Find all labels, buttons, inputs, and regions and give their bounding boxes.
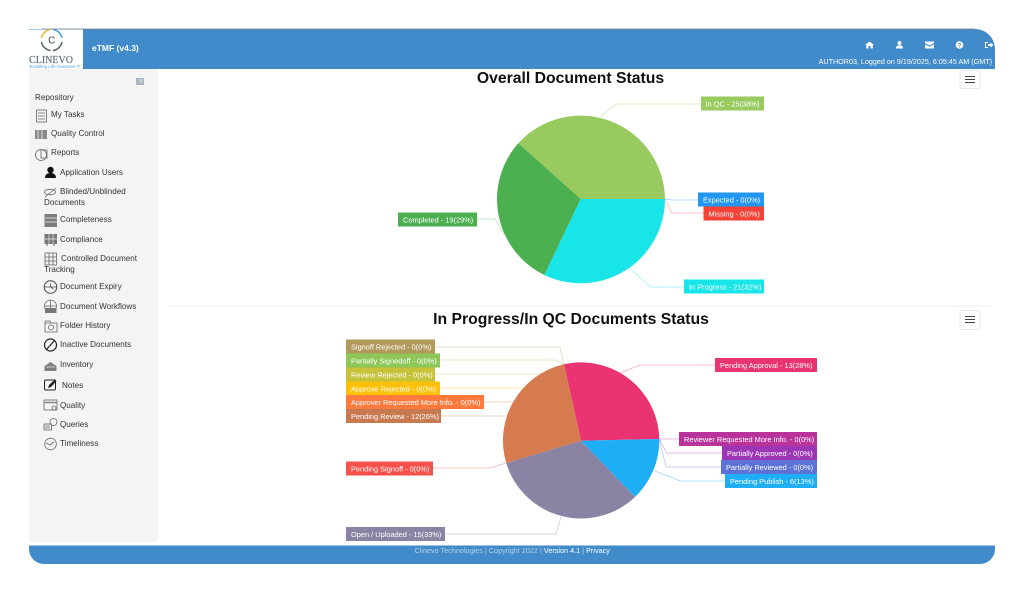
nav item: reports (36, 148, 79, 160)
label: review rejected: Review Rejected - 0(0%) (351, 370, 433, 379)
button: chart menu (960, 310, 980, 330)
nav item: my tasks: My Tasks (51, 110, 85, 119)
nav item: blinded documents: Documents (44, 198, 85, 207)
app title: eTMF (v4.3) (92, 43, 139, 53)
nav item: inactive documents: Inactive Documents (60, 340, 131, 349)
label: reviewer requested more info: Reviewer Requested More Info. - 0(0%) (684, 435, 814, 444)
label: missing: Missing - 0(0%) (708, 209, 760, 218)
nav item: inactive documents (44, 339, 131, 351)
nav item: queries (44, 418, 88, 430)
label: pending publish: Pending Publish - 6(13%) (730, 477, 814, 486)
label: pending signoff: Pending Signoff - 0(0%) (351, 464, 429, 473)
label: pending signoff (346, 462, 433, 476)
nav item: document workflows: Document Workflows (60, 302, 136, 311)
nav item: timeliness (45, 438, 98, 450)
pie chart (497, 116, 665, 283)
nav item: compliance (44, 234, 103, 246)
label: partially reviewed: Partially Reviewed - 0(0%) (726, 463, 813, 472)
nav item: inventory: Inventory (60, 360, 94, 369)
label: in qc: In QC - 25(38%) (706, 99, 759, 108)
nav item: folder history (45, 321, 111, 332)
logo: Clinevo: Enabling Life Sciences IT (30, 64, 81, 69)
nav item: controlled document tracking: Controlled Document (61, 254, 138, 263)
navigation: repository: Repository (35, 93, 75, 102)
label: completed: Completed - 19(29%) (403, 215, 473, 224)
label: approver requested more info: Approver Requested More Info. - 0(0%) (351, 398, 480, 407)
logo: Clinevo: C (48, 36, 55, 46)
nav item: document workflows (44, 300, 136, 313)
nav item: completeness (44, 214, 112, 227)
footer text: Clinevo Technologies | Copyright 2022 | Version 4.1 | Privacy (414, 546, 610, 555)
label: in qc (701, 96, 764, 110)
label: pending review (346, 409, 441, 423)
label: in progress: In Progress - 21(32%) (689, 282, 761, 291)
label: partially signedoff: Partially Signedoff - 0(0%) (351, 356, 437, 365)
icon: user (896, 41, 903, 48)
label: completed (398, 212, 477, 226)
label: approve rejected: Approve Rejected - 0(0%) (351, 384, 436, 393)
label: expected: Expected - 0(0%) (703, 195, 760, 204)
label: pending review: Pending Review - 12(26%) (351, 412, 439, 421)
nav item: blinded documents (44, 187, 126, 207)
nav item: reports: Reports (51, 148, 79, 157)
nav item: quality: Quality (60, 401, 86, 410)
chart: in progress / in qc documents status (346, 310, 980, 541)
footer bar (29, 546, 995, 564)
logo: Clinevo: CLINEVO (29, 55, 73, 66)
icon: mail (925, 42, 934, 48)
icon: help: ? (958, 43, 962, 49)
nav item: notes (44, 380, 83, 390)
nav item: blinded documents: Blinded/Unblinded (60, 187, 126, 196)
label: pending approval: Pending Approval - 13(28%) (720, 361, 812, 370)
label: pending approval (715, 358, 817, 372)
label: open uploaded (346, 527, 445, 541)
label: reviewer requested more info (679, 432, 817, 446)
icon: help (956, 41, 963, 49)
header bar (29, 29, 995, 69)
nav item: inventory (44, 360, 94, 371)
nav item: completeness: Completeness (60, 215, 112, 224)
nav item: document expiry: Document Expiry (60, 282, 123, 291)
label: missing (704, 206, 764, 220)
leader lines (477, 104, 703, 287)
heading: in progress / in qc documents status: In Progress/In QC Documents Status (433, 311, 709, 328)
heading: overall document status: Overall Document Status (477, 70, 664, 87)
label: partially approved: Partially Approved - 0(0%) (727, 449, 813, 458)
nav item: quality control: Quality Control (51, 129, 105, 138)
panel: sidebar (29, 69, 158, 542)
nav item: quality control (35, 129, 105, 139)
nav item: folder history: Folder History (60, 321, 111, 330)
nav item: compliance: Compliance (60, 235, 103, 244)
label: expected (698, 192, 764, 206)
button: chart menu (960, 70, 980, 88)
icon: home (865, 42, 874, 48)
nav item: queries: Queries (60, 420, 88, 429)
label: signoff rejected: Signoff Rejected - 0(0%) (351, 342, 431, 351)
pie chart (503, 362, 659, 518)
chart: overall document status (398, 70, 980, 294)
nav item: timeliness: Timeliness (60, 439, 98, 448)
label: review rejected (346, 368, 435, 382)
nav item: notes: Notes (62, 381, 83, 390)
label: partially signedoff (346, 354, 440, 368)
label: approve rejected (346, 382, 440, 396)
nav item: controlled document tracking (44, 253, 138, 274)
label: approver requested more info (346, 395, 484, 409)
label: partially reviewed (721, 460, 817, 474)
label: signoff rejected (346, 340, 435, 354)
nav item: quality (44, 400, 86, 410)
nav item: my tasks (36, 110, 85, 122)
label: open uploaded: Open / Uploaded - 15(33%) (351, 530, 441, 539)
label: in progress (684, 280, 764, 294)
nav item: controlled document tracking: Tracking (44, 265, 75, 274)
icon: sidebar toggle (136, 78, 144, 85)
icon: logout (985, 42, 994, 48)
label: partially approved (722, 446, 817, 460)
nav item: application users: Application Users (60, 168, 123, 177)
nav item: document expiry (44, 281, 123, 293)
leader lines (433, 347, 725, 534)
label: pending publish (725, 474, 817, 488)
logo: Clinevo (29, 30, 83, 69)
divider (170, 305, 992, 307)
nav item: application users (45, 167, 123, 178)
login info: AUTHOR03, Logged on 9/19/2025, 6:05:45 AM (GMT) (819, 57, 992, 66)
